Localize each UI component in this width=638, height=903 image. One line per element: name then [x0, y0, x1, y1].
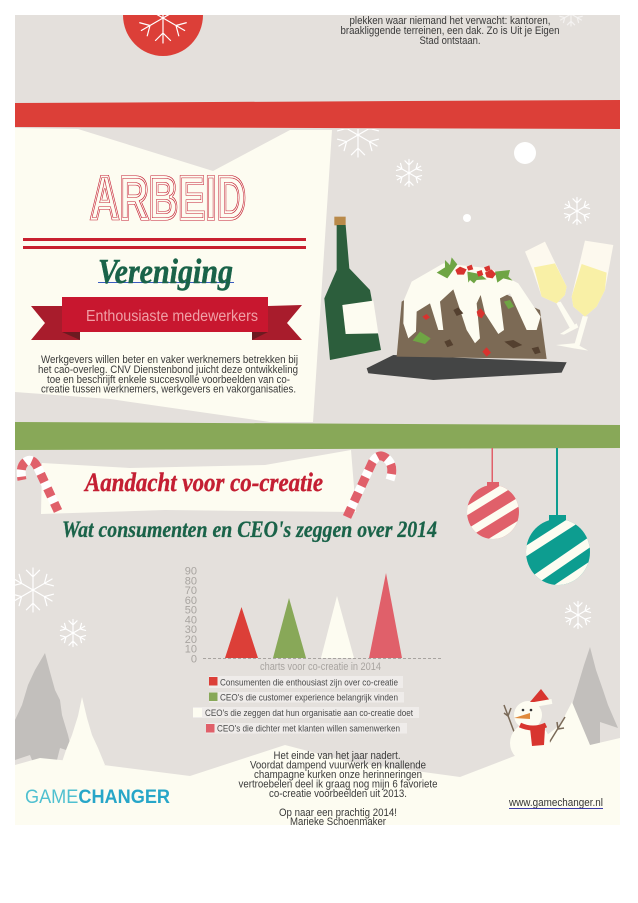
- y axis labels: 20: [185, 634, 197, 646]
- y axis labels: 90: [185, 566, 197, 578]
- grey tree left: [15, 653, 72, 768]
- paragraph: werkgevers: het cao-overleg. CNV Dienstenbond juicht deze ontwikkeling: [38, 364, 298, 376]
- link: website: www.gamechanger.nl: [508, 797, 603, 809]
- y axis labels: 40: [185, 614, 197, 626]
- chart title: charts voor co-creatie in 2014: [260, 661, 381, 673]
- closing text: Op naar een prachtig 2014!: [279, 807, 397, 819]
- paragraph: werkgevers: creatie tussen werknemers, werkgevers en vakorganisaties.: [41, 384, 296, 396]
- legend: CEO's die dichter met klanten willen samenwerken: [217, 724, 400, 734]
- grey tree right: [565, 647, 618, 745]
- icon: snowman: [504, 689, 565, 763]
- closing text: [238, 750, 438, 828]
- closing text: Voordat dampend vuurwerk en knallende: [250, 760, 426, 772]
- closing text: co-creatie voorbeelden uit 2013.: [269, 788, 407, 800]
- y axis labels: 30: [185, 624, 197, 636]
- closing text: champagne kurken onze herinneringen: [254, 769, 422, 781]
- closing text: Het einde van het jaar nadert.: [274, 750, 400, 762]
- double rule: [23, 238, 306, 249]
- ribbon: Enthousiaste medewerkers: Enthousiaste medewerkers: [86, 308, 258, 325]
- closing text: Marieke Schoenmaker: [290, 816, 386, 828]
- y axis labels: 60: [185, 595, 197, 607]
- ribbon: Enthousiaste medewerkers: [31, 297, 302, 340]
- y axis labels: 50: [185, 604, 197, 616]
- intro text fragment: plekken waar niemand het verwacht: kantoren,: [350, 15, 550, 27]
- y axis labels: 70: [185, 585, 197, 597]
- legend: CEO's die zeggen dat hun organisatie aan co-creatie doet: [205, 708, 413, 719]
- red band: [15, 100, 620, 129]
- legend: [193, 676, 419, 734]
- heading: Wat consumenten: Wat consumenten en CEO's zeggen over 2014: [62, 517, 437, 542]
- y axis labels: 0: [191, 653, 197, 665]
- intro text fragment: braakliggende terreinen, een dak. Zo is Uit je Eigen: [340, 25, 560, 37]
- y axis labels: [185, 566, 197, 665]
- snow ground: [15, 702, 620, 825]
- cream tree left: [60, 697, 105, 768]
- paragraph: werkgevers: [38, 354, 298, 396]
- heading: Vereniging: Vereniging: [98, 252, 233, 291]
- green band: [15, 422, 620, 450]
- intro text fragment: Stad ontstaan.: [420, 35, 480, 47]
- icon: candy cane right: [347, 456, 392, 517]
- intro text fragment: [340, 15, 560, 47]
- icon: pink striped ornament: [467, 448, 519, 539]
- closing text: vertroebelen deel ik graag nog mijn 6 favoriete: [238, 778, 438, 790]
- snowflakes lower: [11, 568, 592, 646]
- icon: candy cane left: [21, 460, 58, 511]
- title: ARBEID: ARBEID: [90, 164, 246, 232]
- legend: Consumenten die enthousiast zijn over co-creatie: [220, 678, 398, 688]
- paragraph: werkgevers: toe en beschrijft enkele succesvolle voorbeelden van co-: [47, 374, 290, 386]
- y axis labels: 10: [185, 644, 197, 656]
- icon: wine bottle: [324, 217, 381, 360]
- y axis labels: 80: [185, 575, 197, 587]
- icon: red bauble with snowflake: [123, 15, 203, 56]
- bar chart: triangles: [185, 566, 442, 665]
- faint snowflake top right: [559, 15, 583, 26]
- icon: teal striped ornament: [526, 448, 590, 585]
- snowflakes and snow dots upper: [336, 113, 591, 224]
- paragraph: werkgevers: Werkgevers willen beter en vaker werknemers betrekken bij: [41, 354, 298, 366]
- logo: GAMECHANGER: GAMECHANGER: [25, 786, 170, 808]
- icon: christmas pudding: [367, 257, 567, 380]
- legend: CEO's die customer experience belangrijk vinden: [220, 692, 398, 704]
- cream panel: [15, 128, 332, 422]
- icon: champagne glasses: [525, 241, 613, 351]
- heading: Aandacht voor co-creatie: Aandacht voor co-creatie: [83, 468, 323, 497]
- cream banner: [41, 450, 356, 514]
